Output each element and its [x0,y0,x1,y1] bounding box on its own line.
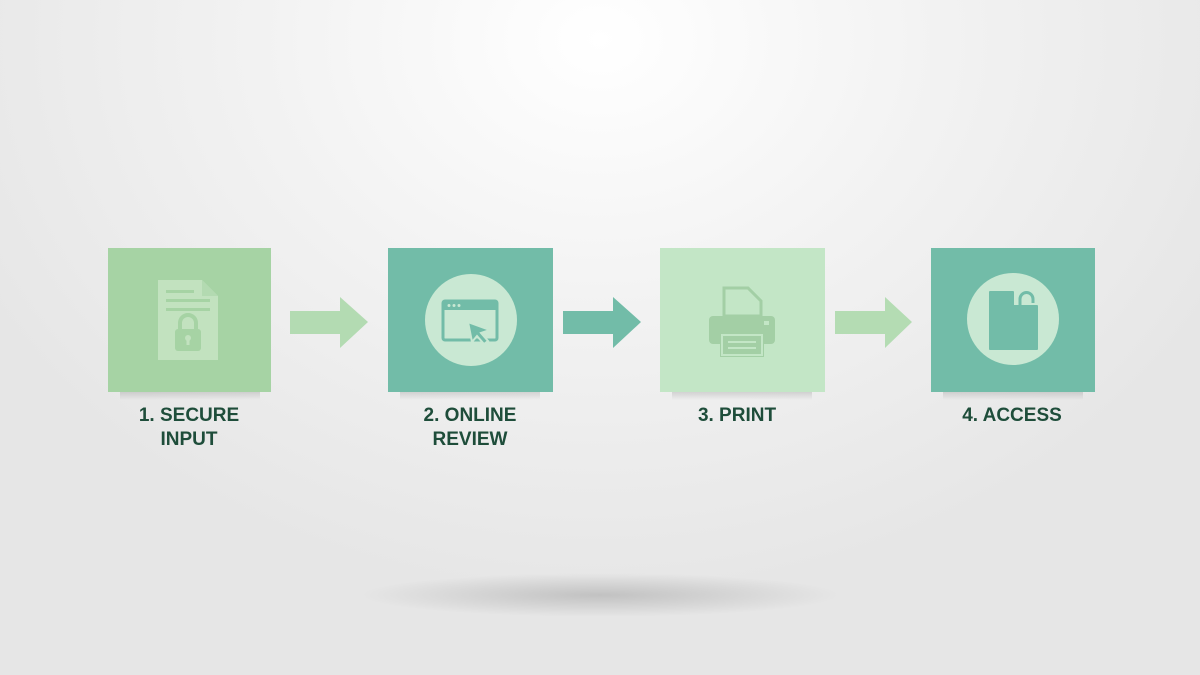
arrow 3 [835,297,912,348]
arrow 2 [563,297,641,348]
icon: locked document [158,280,218,360]
floor shadow [360,573,840,617]
label: 3. PRINT [698,405,776,426]
icon: printer [709,288,775,357]
icon: unlocked document [967,273,1059,365]
step 1: secure input [108,248,271,450]
arrow 1 [290,297,368,348]
label: 2. ONLINE [424,405,516,426]
icon: browser with cursor [425,274,517,366]
step 3: print [660,248,825,426]
step 4: access [931,248,1095,426]
step 1: secure input: INPUT [160,429,218,450]
step 2: online review: REVIEW [433,429,508,450]
step 2: online review [388,248,553,450]
label: 4. ACCESS [962,405,1062,426]
label: 1. SECURE [139,405,239,426]
